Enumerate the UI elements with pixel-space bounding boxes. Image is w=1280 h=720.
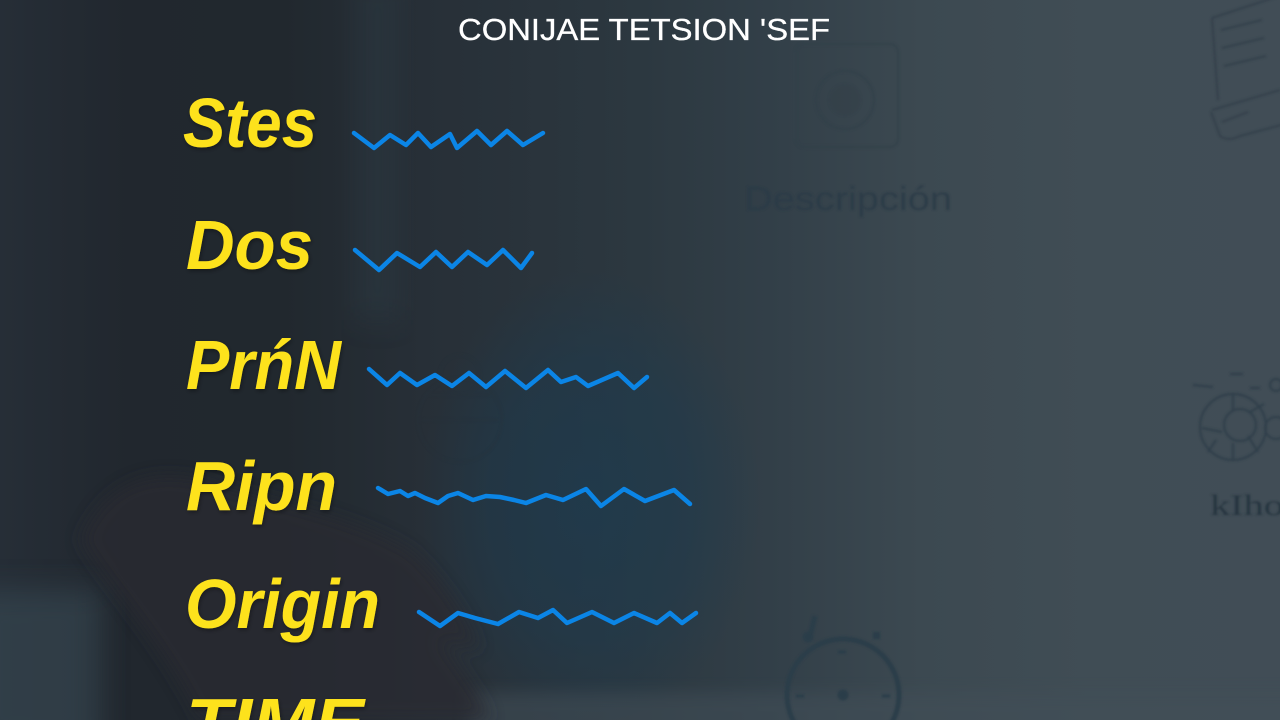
row: Prín (186, 326, 647, 404)
squiggle: Origin (419, 610, 696, 626)
squiggle: Prín (369, 369, 647, 388)
faint label: Descripción: Descripción (744, 180, 952, 217)
faint icon: stopwatch (787, 616, 899, 720)
row: Origin (185, 565, 696, 643)
hand silhouette (80, 476, 490, 720)
squiggle: Stes (354, 131, 543, 148)
row: Ripn (186, 447, 690, 525)
faint icon: document with pen (1211, 0, 1280, 139)
row: Stes (183, 84, 543, 162)
label: Prín: PrńN (186, 326, 342, 404)
label: Origin: Origin (185, 565, 380, 643)
faint icon: target circle (418, 355, 502, 462)
row: Dos (186, 206, 532, 284)
squiggle: Dos (355, 250, 532, 270)
faint label: kIho: kIho (1210, 489, 1280, 522)
faint icon: globe network (1193, 374, 1280, 460)
squiggle: Ripn (378, 488, 690, 506)
title: CONIJAE TETSION 'SEF (458, 12, 830, 47)
faint icon: camera (796, 44, 898, 147)
label: Ripn: Ripn (186, 447, 337, 525)
label: Stes: Stes (183, 84, 317, 162)
label: Dos: Dos (186, 206, 313, 284)
